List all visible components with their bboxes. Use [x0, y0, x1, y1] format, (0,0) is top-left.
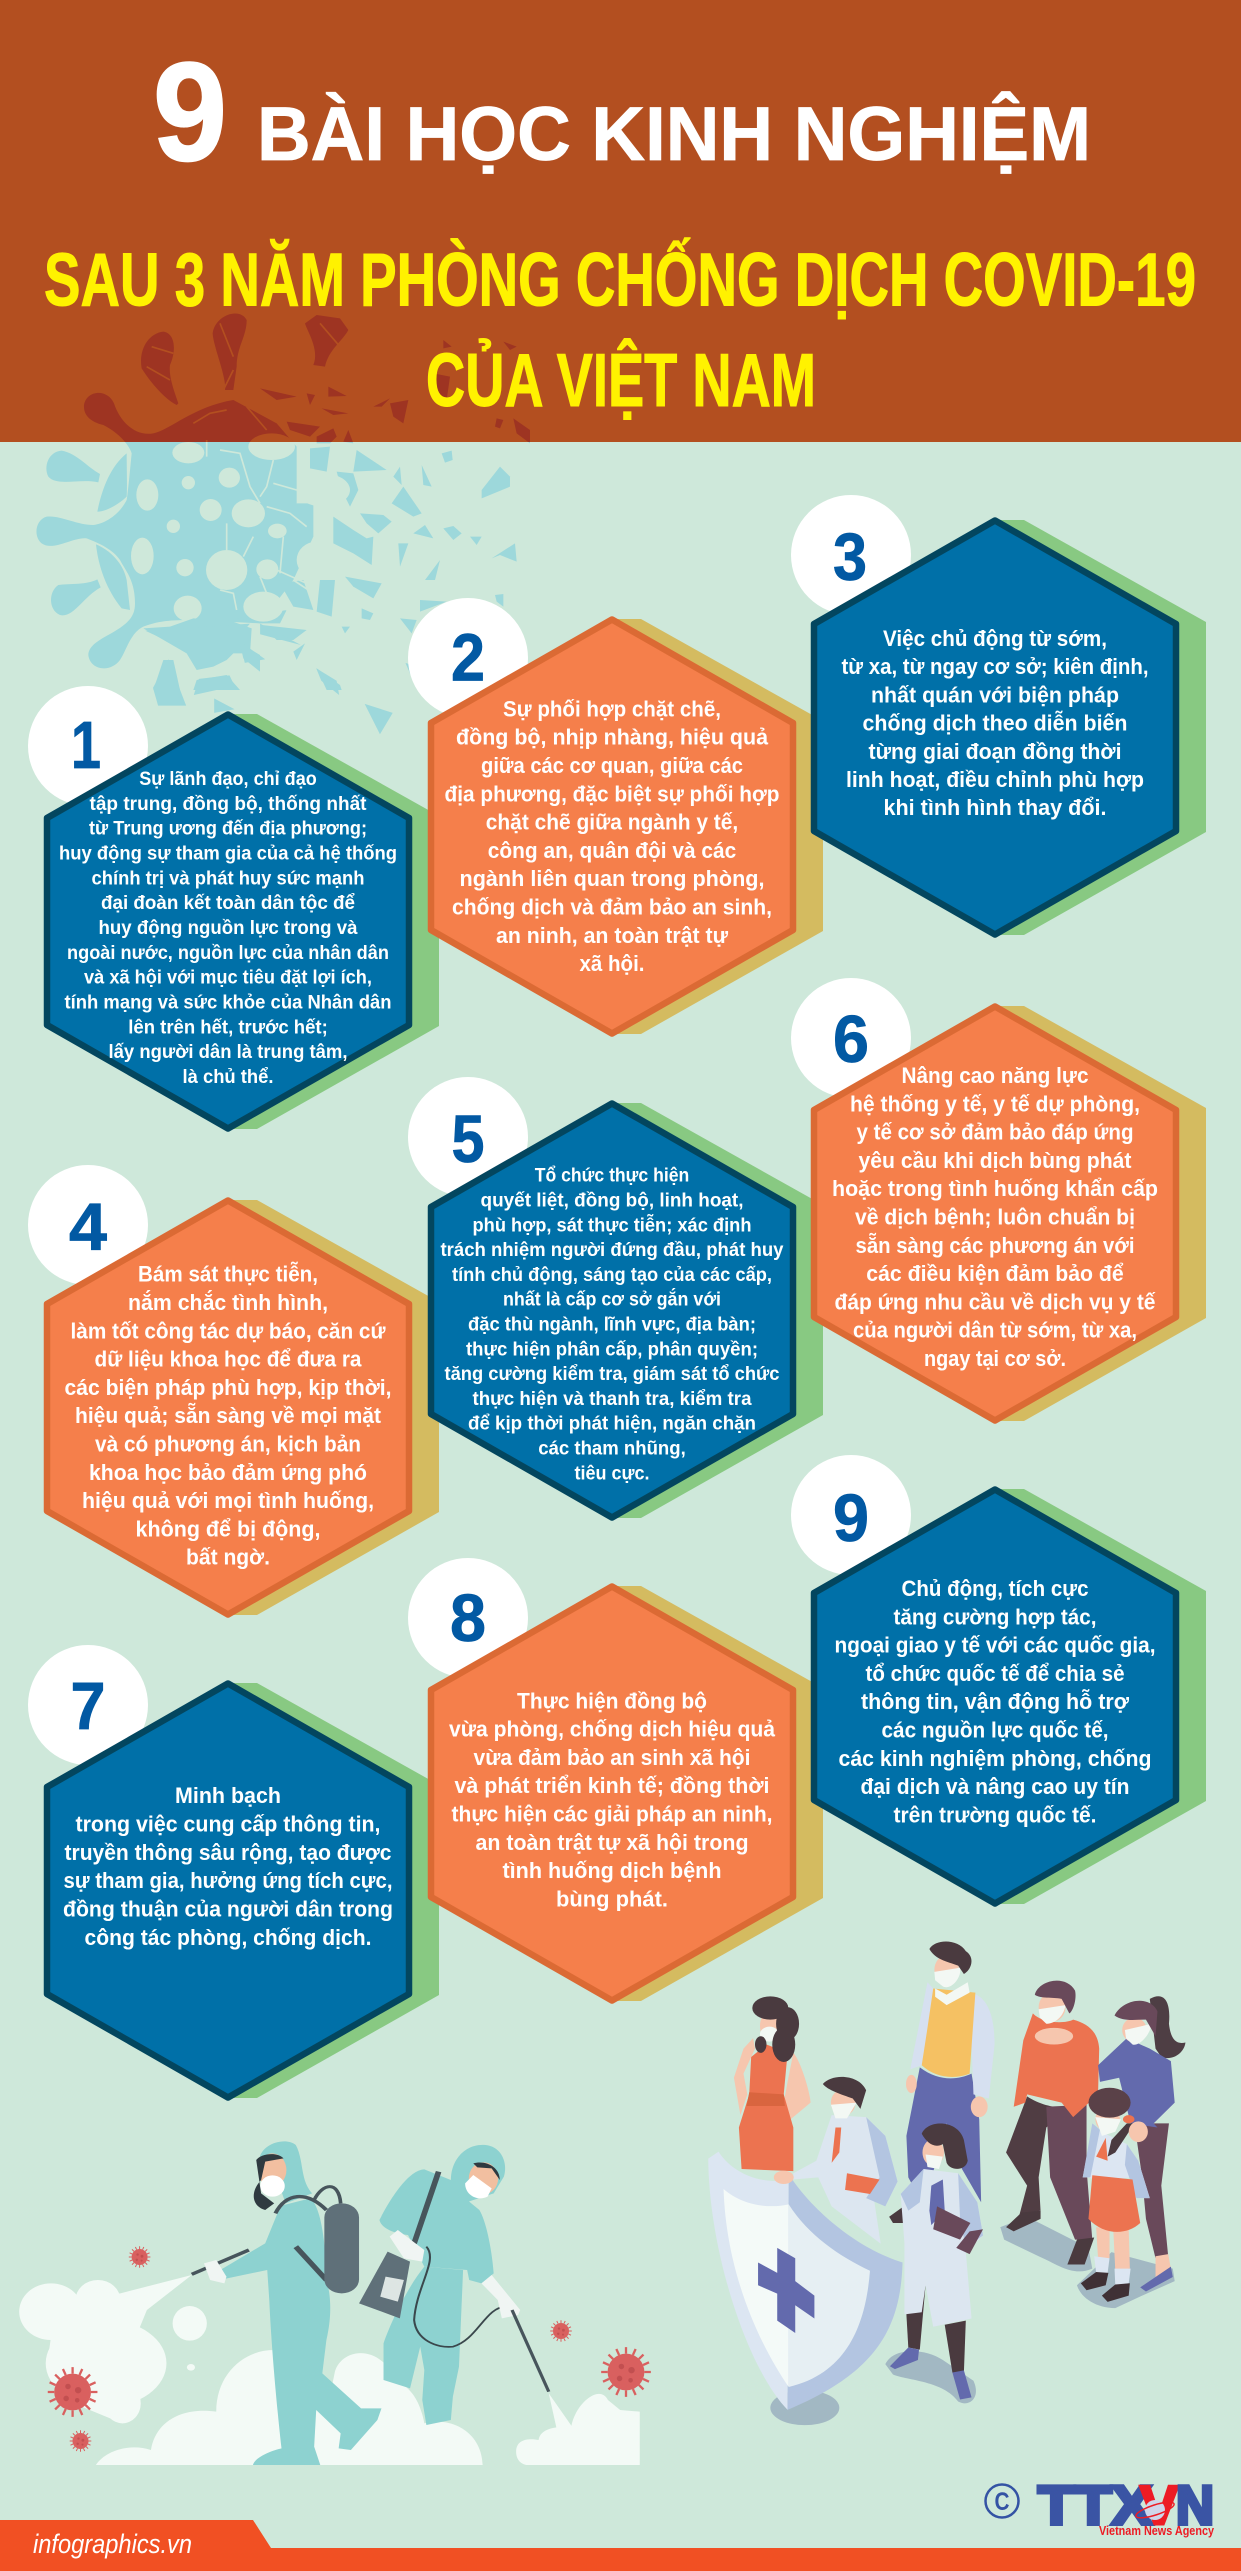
number 4: 4: [69, 1190, 107, 1265]
number 2: 2: [451, 620, 485, 696]
text block lesson 1: là chủ thể.: [182, 1066, 274, 1088]
text block lesson 3: Việc chủ động từ sớm,: [883, 626, 1107, 651]
logo: TTXVN Vietnam News Agency: [1038, 2474, 1215, 2538]
logo: TTXVN Vietnam News Agency: TTX: [1038, 2474, 1152, 2536]
text block lesson 8: tình huống dịch bệnh: [502, 1858, 722, 1883]
person: girl in orange skirt: [1081, 2088, 1150, 2302]
person: mother in blue sweater: [1098, 1996, 1185, 2292]
text block lesson 9: tổ chức quốc tế để chia sẻ: [866, 1661, 1124, 1686]
text block lesson 5: trách nhiệm người đứng đầu, phát huy: [440, 1239, 784, 1261]
text block lesson 7: Minh bạch: [175, 1783, 281, 1808]
text block lesson 4: không để bị động,: [136, 1516, 320, 1541]
text block lesson 8: thực hiện các giải pháp an ninh,: [452, 1802, 772, 1826]
text block lesson 2: ngành liên quan trong phòng,: [460, 866, 764, 891]
text block lesson 5: các tham nhũng,: [538, 1438, 686, 1460]
logo: TTXVN Vietnam News Agency: V: [1140, 2474, 1178, 2536]
header band: [0, 0, 1241, 442]
footer bar with tab: [0, 2520, 1241, 2571]
text block lesson 5: thực hiện và thanh tra, kiểm tra: [472, 1388, 752, 1410]
text block lesson 5: Tổ chức thực hiện: [535, 1165, 689, 1187]
text block lesson 1: lên trên hết, trước hết;: [128, 1016, 328, 1038]
text block lesson 5: quyết liệt, đồng bộ, linh hoạt,: [480, 1190, 744, 1212]
text block lesson 6: các điều kiện đảm bảo để: [866, 1261, 1124, 1286]
person: father in orange sweater: [1006, 1981, 1099, 2265]
text block lesson 1: Sự lãnh đạo, chỉ đạo: [139, 768, 317, 790]
illustration: disinfection workers spraying: [19, 2141, 651, 2465]
text block lesson 1: ngoài nước, nguồn lực của nhân dân: [67, 942, 389, 964]
person: male doctor: [793, 2077, 898, 2244]
text block lesson 4: các biện pháp phù hợp, kịp thời,: [64, 1375, 392, 1400]
text block lesson 9: [834, 1576, 1156, 1827]
text block lesson 4: hiệu quả; sẵn sàng về mọi mặt: [75, 1403, 382, 1428]
text block lesson 9: đại dịch và nâng cao uy tín: [860, 1774, 1130, 1799]
text block lesson 7: trong việc cung cấp thông tin,: [76, 1811, 380, 1836]
text block lesson 3: [842, 626, 1148, 820]
text block lesson 2: đồng bộ, nhịp nhàng, hiệu quả: [456, 725, 769, 750]
text block lesson 7: [63, 1783, 393, 1950]
title: big number 9: 9: [153, 33, 227, 190]
spray clouds: [19, 2275, 640, 2465]
text block lesson 9: các kinh nghiệm phòng, chống: [838, 1746, 1152, 1771]
panel: lesson 6: [791, 978, 1206, 1421]
text block lesson 5: để kịp thời phát hiện, ngăn chặn: [468, 1413, 756, 1435]
text block lesson 7: sự tham gia, hưởng ứng tích cực,: [64, 1868, 392, 1893]
text block lesson 1: tính mạng và sức khỏe của Nhân dân: [64, 992, 392, 1014]
text block lesson 2: Sự phối hợp chặt chẽ,: [503, 696, 721, 721]
number 9: 9: [833, 1481, 869, 1556]
panel: lesson 8: [408, 1558, 823, 2001]
text block lesson 6: hoặc trong tình huống khẩn cấp: [832, 1176, 1158, 1201]
text block lesson 3: từng giai đoạn đồng thời: [868, 739, 1122, 764]
number 1: 1: [71, 708, 101, 783]
text block lesson 1: [59, 768, 397, 1088]
worker 1 (woman): [192, 2141, 381, 2465]
text block lesson 5: phù hợp, sát thực tiễn; xác định: [472, 1212, 752, 1236]
text block lesson 6: Nâng cao năng lực: [902, 1063, 1088, 1088]
text block lesson 6: của người dân từ sớm, từ xa,: [853, 1318, 1137, 1343]
text block lesson 6: hệ thống y tế, y tế dự phòng,: [850, 1091, 1140, 1116]
text block lesson 8: [449, 1688, 776, 1911]
panel: lesson 4: [28, 1165, 439, 1615]
text block lesson 8: an toàn trật tự xã hội trong: [476, 1830, 748, 1855]
text block lesson 9: ngoại giao y tế với các quốc gia,: [834, 1633, 1156, 1658]
text block lesson 5: tăng cường kiểm tra, giám sát tổ chức: [444, 1363, 780, 1385]
text block lesson 4: bất ngờ.: [186, 1545, 270, 1570]
text block lesson 4: nắm chắc tình hình,: [128, 1290, 328, 1315]
person: man in yellow vest: [889, 1942, 995, 2223]
text block lesson 9: Chủ động, tích cực: [902, 1576, 1088, 1601]
text block lesson 8: bùng phát.: [556, 1886, 668, 1911]
text block lesson 6: về dịch bệnh; luôn chuẩn bị: [855, 1204, 1135, 1230]
panel: lesson 2: [408, 598, 823, 1034]
panel: lesson 9: [791, 1455, 1206, 1904]
text block lesson 7: công tác phòng, chống dịch.: [84, 1925, 372, 1950]
text block lesson 6: yêu cầu khi dịch bùng phát: [858, 1148, 1132, 1173]
text block lesson 5: tiêu cực.: [574, 1462, 650, 1484]
logo: copyright mark: [986, 2484, 1018, 2518]
ground shadows: [770, 2217, 1175, 2425]
text block lesson 1: lấy người dân là trung tâm,: [108, 1041, 348, 1063]
footer source text: infographics.vn: [33, 2529, 192, 2559]
text block lesson 1: chính trị và phát huy sức mạnh: [92, 867, 364, 889]
text block lesson 2: chặt chẽ giữa ngành y tế,: [486, 810, 738, 835]
text block lesson 4: dữ liệu khoa học để đưa ra: [94, 1347, 362, 1372]
text block lesson 5: thực hiện phân cấp, phân quyền;: [466, 1338, 758, 1360]
text block lesson 3: từ xa, từ ngay cơ sở; kiên định,: [842, 654, 1148, 679]
title: line 1: BÀI HỌC KINH NGHIỆM: [257, 91, 1091, 177]
number 6: 6: [833, 1002, 869, 1077]
icon: medical shield with cross: [708, 2152, 903, 2410]
text block lesson 5: đặc thù ngành, lĩnh vực, địa bàn;: [468, 1314, 756, 1336]
panel: lesson 7: [28, 1645, 439, 2098]
worker 2 (man): [359, 2145, 549, 2425]
text block lesson 8: và phát triển kinh tế; đồng thời: [454, 1773, 770, 1798]
text block lesson 9: tăng cường hợp tác,: [894, 1604, 1096, 1629]
logo: TTXVN Vietnam News Agency: Vietnam News Agency: [1099, 2523, 1215, 2538]
text block lesson 2: công an, quân đội và các: [488, 838, 736, 863]
text block lesson 2: [444, 696, 780, 976]
text block lesson 5: [440, 1165, 784, 1484]
number 7: 7: [70, 1669, 106, 1744]
text block lesson 3: nhất quán với biện pháp: [871, 682, 1119, 707]
panel: lesson 1: [28, 686, 439, 1129]
text block lesson 2: xã hội.: [580, 951, 644, 976]
text block lesson 7: đồng thuận của người dân trong: [63, 1897, 393, 1922]
text block lesson 9: các nguồn lực quốc tế,: [882, 1718, 1108, 1742]
text block lesson 8: vừa phòng, chống dịch hiệu quả: [449, 1717, 776, 1742]
text block lesson 9: thông tin, vận động hỗ trợ: [861, 1689, 1129, 1714]
text block lesson 5: tính chủ động, sáng tạo của các cấp,: [452, 1264, 772, 1286]
text block lesson 1: và xã hội với mục tiêu đặt lợi ích,: [84, 967, 372, 989]
panel: lesson 5: [408, 1077, 823, 1518]
text block lesson 5: nhất là cấp cơ sở gắn với: [503, 1287, 721, 1311]
text block lesson 1: từ Trung ương đến địa phương;: [89, 818, 367, 840]
text block lesson 9: trên trường quốc tế.: [894, 1802, 1096, 1827]
illustration: people with masks behind medical shield: [708, 1942, 1185, 2425]
text block lesson 1: tập trung, đồng bộ, thống nhất: [90, 793, 367, 815]
text block lesson 6: ngay tại cơ sở.: [924, 1346, 1066, 1371]
text block lesson 3: khi tình hình thay đổi.: [884, 795, 1106, 820]
text block lesson 4: làm tốt công tác dự báo, căn cứ: [70, 1318, 386, 1343]
text block lesson 6: đáp ứng nhu cầu về dịch vụ y tế: [834, 1289, 1156, 1314]
text block lesson 8: Thực hiện đồng bộ: [517, 1688, 707, 1713]
background virus illustration breaking apart: [36, 313, 530, 734]
text block lesson 4: khoa học bảo đảm ứng phó: [89, 1460, 367, 1485]
number 5: 5: [452, 1102, 484, 1177]
text block lesson 4: [64, 1262, 392, 1570]
title: line 3: CỦA VIỆT NAM: [426, 338, 816, 422]
text block lesson 1: huy động nguồn lực trong và: [98, 917, 358, 939]
text block lesson 6: [832, 1063, 1158, 1371]
number 8: 8: [450, 1581, 486, 1656]
number 3: 3: [833, 520, 867, 595]
icon: red virus particles: [48, 2246, 651, 2452]
person: female doctor: [890, 2124, 983, 2399]
title: [44, 33, 1196, 422]
text block lesson 4: hiệu quả với mọi tình huống,: [82, 1488, 374, 1513]
panel: lesson 3: [791, 495, 1206, 935]
text block lesson 4: và có phương án, kịch bản: [95, 1432, 361, 1456]
text block lesson 2: chống dịch và đảm bảo an sinh,: [452, 894, 772, 920]
logo: TTXVN Vietnam News Agency: N: [1176, 2474, 1214, 2536]
text block lesson 2: địa phương, đặc biệt sự phối hợp: [444, 781, 780, 806]
text block lesson 3: linh hoạt, điều chỉnh phù hợp: [846, 767, 1144, 792]
text block lesson 3: chống dịch theo diễn biến: [862, 711, 1128, 736]
person: woman in red dress: [734, 1996, 811, 2171]
text block lesson 1: đại đoàn kết toàn dân tộc để: [101, 892, 355, 914]
text block lesson 7: truyền thông sâu rộng, tạo được: [64, 1840, 392, 1865]
text block lesson 1: huy động sự tham gia của cả hệ thống: [59, 842, 397, 864]
text block lesson 8: vừa đảm bảo an sinh xã hội: [474, 1745, 750, 1770]
text block lesson 2: giữa các cơ quan, giữa các: [481, 753, 743, 778]
text block lesson 6: sẵn sàng các phương án với: [856, 1233, 1134, 1258]
text block lesson 2: an ninh, an toàn trật tự: [496, 923, 728, 948]
text block lesson 6: y tế cơ sở đảm bảo đáp ứng: [856, 1120, 1134, 1145]
text block lesson 4: Bám sát thực tiễn,: [138, 1262, 318, 1287]
logo: copyright mark: C: [994, 2488, 1010, 2516]
